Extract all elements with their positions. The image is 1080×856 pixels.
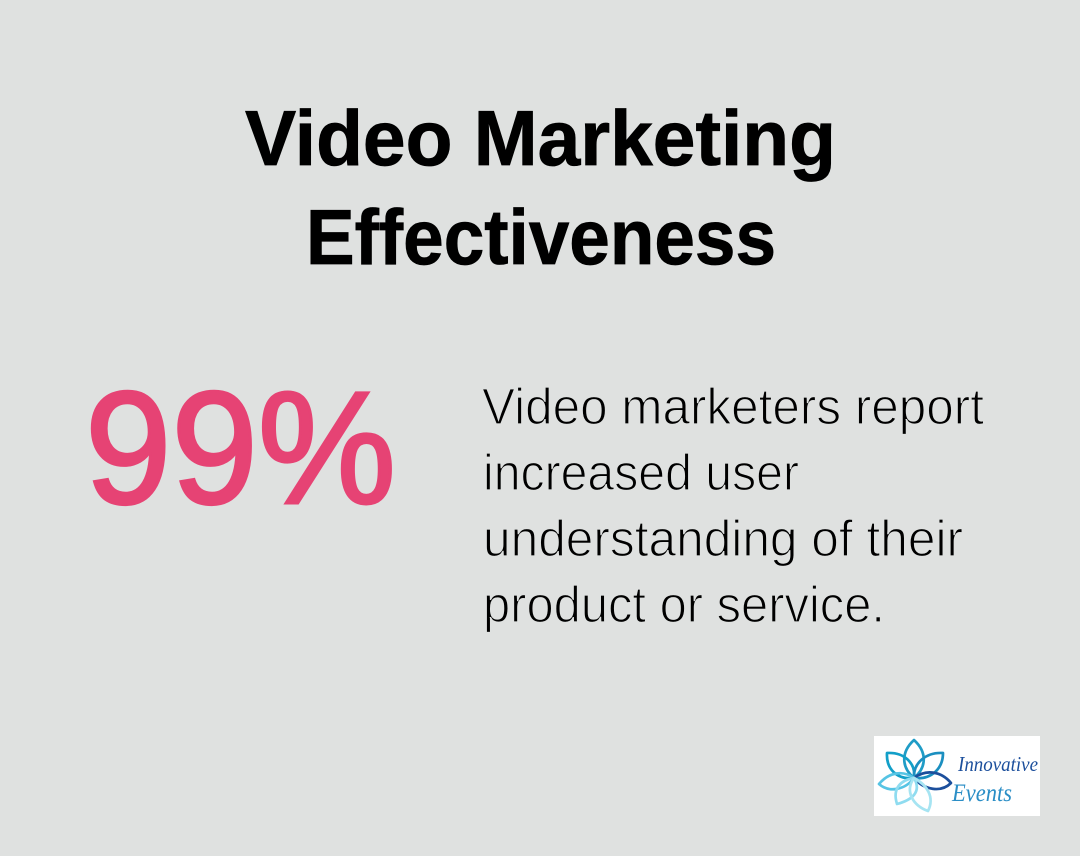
description text: increased user <box>483 444 799 501</box>
description text: product or service. <box>483 576 885 633</box>
logo wordmark: Innovative <box>957 752 1038 776</box>
title: Video Marketing <box>245 94 836 182</box>
icon: lotus flower <box>879 740 951 811</box>
description text: understanding of their <box>483 510 963 567</box>
title: Effectiveness <box>306 193 776 281</box>
logo wordmark: Events <box>951 780 1012 807</box>
description text: Video marketers report <box>482 378 984 435</box>
logo wordmark <box>951 752 1038 807</box>
title <box>245 94 836 281</box>
description text <box>482 378 984 633</box>
big statistic: 99%: 99% <box>85 358 396 537</box>
logo: Innovative Events <box>874 736 1040 816</box>
